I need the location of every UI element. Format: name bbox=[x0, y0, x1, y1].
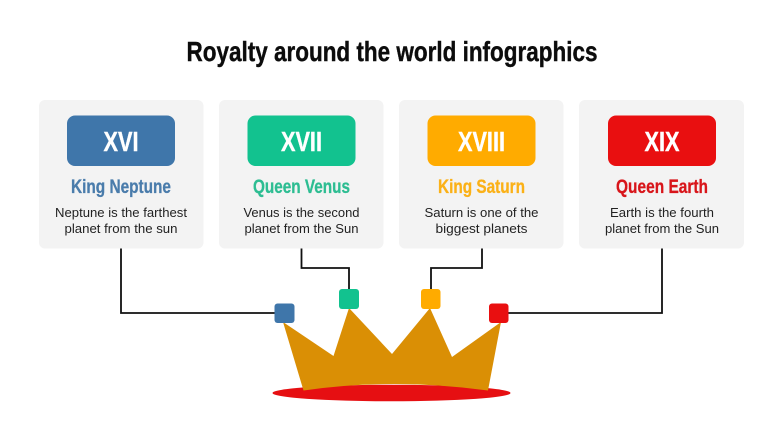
text: Earth description: planet from the Sun bbox=[605, 221, 719, 236]
text: Venus description: Venus is the second bbox=[244, 205, 360, 220]
badge: XVIII: XVIII bbox=[458, 126, 505, 157]
gem: red bbox=[489, 304, 508, 323]
heading: Queen Earth: Queen Earth bbox=[616, 177, 708, 198]
crown body bbox=[283, 308, 501, 390]
text: Neptune description: Neptune is the farthest bbox=[55, 205, 187, 220]
text: Neptune description: planet from the sun bbox=[64, 221, 178, 236]
text: Saturn description: biggest planets bbox=[436, 221, 528, 236]
badge: XVII: XVII bbox=[281, 126, 322, 157]
panel: Queen Earth bbox=[579, 100, 744, 248]
gem: blue bbox=[274, 304, 294, 323]
badge: XVI bbox=[67, 116, 175, 166]
connector: Earth bbox=[507, 248, 662, 313]
text: Venus description: planet from the Sun bbox=[244, 221, 358, 236]
gem: orange bbox=[421, 289, 440, 309]
panel: Queen Venus bbox=[219, 100, 384, 248]
panel: King Neptune bbox=[39, 100, 204, 248]
gem: green bbox=[339, 289, 359, 309]
badge: XVIII bbox=[428, 116, 536, 166]
heading: King Saturn: King Saturn bbox=[438, 177, 525, 198]
title: Royalty around the world infographics bbox=[186, 36, 598, 67]
connector: Neptune bbox=[121, 248, 276, 313]
badge: XVI: XVI bbox=[104, 126, 138, 157]
panel: King Saturn bbox=[399, 100, 564, 248]
badge: XVII bbox=[248, 116, 356, 166]
badge: XIX bbox=[608, 116, 716, 166]
crown illustration bbox=[272, 289, 510, 401]
text: Saturn description: Saturn is one of the bbox=[424, 205, 538, 220]
text: Earth description: Earth is the fourth bbox=[610, 205, 714, 220]
heading: King Neptune: King Neptune bbox=[71, 177, 171, 198]
badge: XIX: XIX bbox=[644, 126, 680, 157]
connector: Venus bbox=[302, 248, 349, 290]
crown base ellipse bbox=[272, 385, 510, 401]
connector: Saturn bbox=[431, 248, 482, 290]
heading: Queen Venus: Queen Venus bbox=[253, 177, 350, 198]
